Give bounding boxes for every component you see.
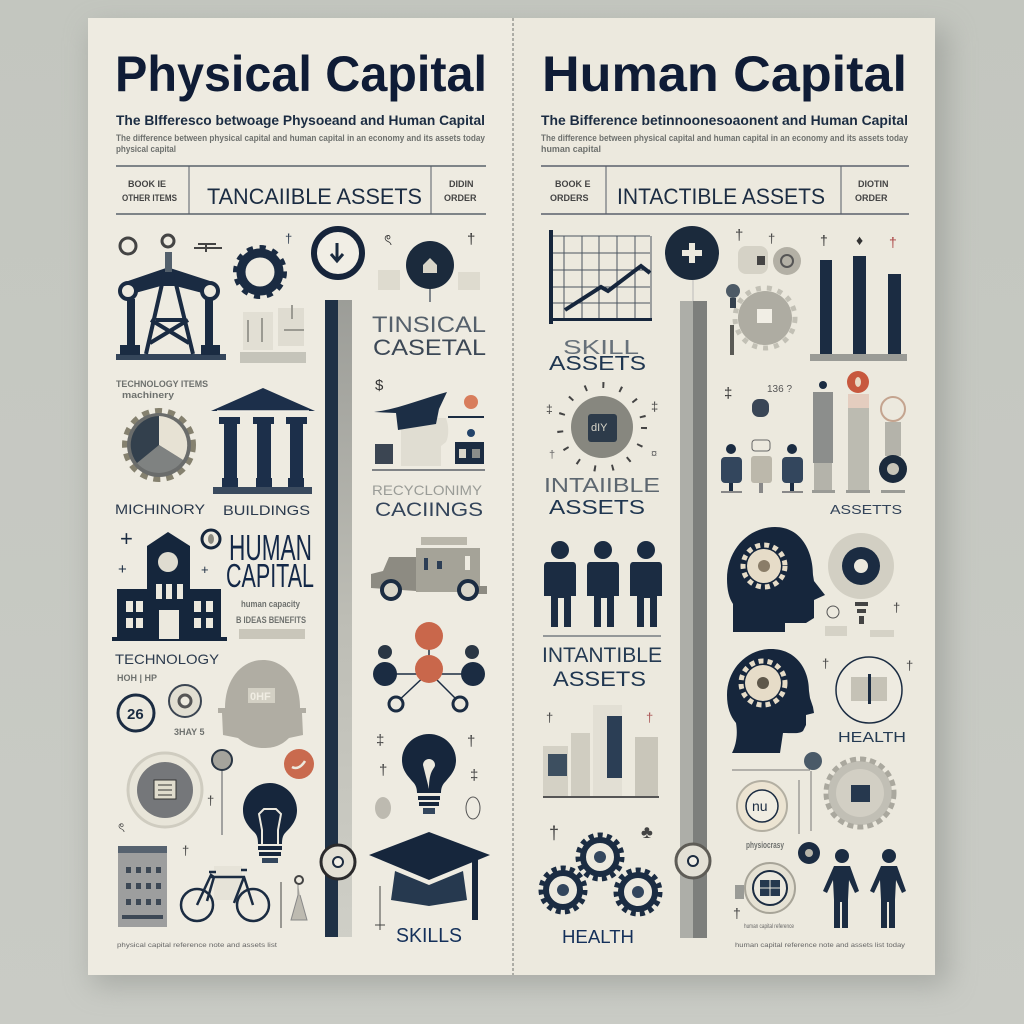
small symbols lower left: † xyxy=(182,843,189,858)
icon: medallion with rule: physiocrasy xyxy=(746,840,784,850)
icon: head with gear top xyxy=(727,527,825,632)
icon: lower medallion xyxy=(733,842,820,930)
label: skill assets: SKILL xyxy=(563,337,639,359)
icon: health target xyxy=(822,656,913,723)
icon: radiant circle: ¤ xyxy=(651,448,657,460)
right column: human capital xyxy=(541,46,913,949)
poster panel xyxy=(88,18,935,975)
label: skill assets xyxy=(549,337,646,375)
footnote left: physical capital reference note and assets list xyxy=(117,943,277,949)
icon: graduation cap xyxy=(369,832,490,920)
title: human capital: Human Capital xyxy=(542,46,907,102)
icon: dark circle top right: † xyxy=(467,231,475,248)
icon: radiant circle: dIY xyxy=(591,422,608,434)
label: human capital xyxy=(226,527,314,594)
icon: grey sketches: † xyxy=(768,231,775,246)
icon: circle badges: 3HAY 5 xyxy=(174,727,205,737)
label: tinsical casetal xyxy=(372,312,486,360)
icon: radiant circle: † xyxy=(549,449,555,461)
mini bar chart xyxy=(543,705,659,798)
icon: circle badges: 26 xyxy=(127,706,144,723)
label: human capital: HUMAN xyxy=(229,527,312,568)
small plus signs: + xyxy=(118,561,127,578)
label: health left: HEALTH xyxy=(562,927,634,947)
icon: head with gear lower xyxy=(727,649,814,753)
label: intangible assets xyxy=(544,475,660,519)
banner: tangible assets: ORDER xyxy=(444,193,477,203)
label: intantible assets: INTANTIBLE xyxy=(542,644,662,667)
icon: lower timeline marker xyxy=(321,845,355,879)
small captions xyxy=(236,599,306,639)
small text left: TECHNOLOGY ITEMS xyxy=(116,379,208,389)
icon: grey sketches xyxy=(726,227,801,355)
title: physical capital: Physical Capital xyxy=(115,46,487,102)
label: tinsical casetal: TINSICAL xyxy=(372,312,486,337)
small text left xyxy=(116,379,208,400)
label: caciings: RECYCLONIMY xyxy=(372,482,483,498)
label: health right: HEALTH xyxy=(838,729,906,746)
icon: school building xyxy=(112,532,227,641)
small captions: B IDEAS BENEFITS xyxy=(236,615,306,625)
icon: top marker right xyxy=(665,226,719,280)
label: intantible assets xyxy=(542,636,662,691)
small symbols beside bulb xyxy=(375,732,480,819)
icon: two people xyxy=(823,849,906,928)
icon: radiant circle: ‡ xyxy=(651,399,658,414)
body text left: The difference between physical capital and human capital in an economy and its assets today xyxy=(116,133,485,143)
icon: small dollar: $ xyxy=(375,377,384,394)
label: intangible assets: INTAIIBLE xyxy=(544,475,660,497)
icon: circle badges xyxy=(118,685,205,737)
banner: intangible assets: BOOK E xyxy=(555,179,591,189)
icon: pin and orange badge xyxy=(212,749,314,835)
label: intangible assets: ASSETS xyxy=(549,497,645,519)
icon: document blocks xyxy=(240,305,306,363)
label: skill assets: ASSETS xyxy=(549,353,646,375)
icon: gear top xyxy=(236,248,284,296)
icon: bicycle xyxy=(181,866,269,921)
icon: medallion with rule: nu xyxy=(752,798,768,814)
label: tinsical casetal: CASETAL xyxy=(373,335,486,360)
small symbols lower left xyxy=(118,793,307,928)
banner: tangible assets: OTHER ITEMS xyxy=(122,193,177,203)
bar chart top right: ♦ xyxy=(856,232,863,248)
timeline bar right xyxy=(680,280,707,938)
small plus signs: + xyxy=(201,562,209,577)
icon: three small figures: 136 ? xyxy=(767,384,792,395)
icon: lower marker right xyxy=(676,844,710,878)
subtitle left: The Blfferesco betwoage Physoeand and Human Capital xyxy=(116,112,485,128)
icon: grey sketches: † xyxy=(735,227,743,244)
bar chart top right: † xyxy=(889,234,897,250)
icon: oil derrick xyxy=(116,252,226,360)
bar chart top right: † xyxy=(820,232,828,248)
icon: machinery gear pie xyxy=(125,411,193,479)
icon: dark circle top right xyxy=(378,231,480,302)
icon: gear target xyxy=(825,533,900,637)
body text right: The difference between physical capital and human capital in an economy and its assets today xyxy=(541,133,908,143)
label: skills: SKILLS xyxy=(396,925,462,947)
label: caciings: CACIINGS xyxy=(375,500,483,521)
icon: dark circle top right: ৎ xyxy=(384,232,392,249)
mini bar chart: † xyxy=(646,710,653,725)
label: machinery: MICHINORY xyxy=(115,501,206,517)
banner: tangible assets xyxy=(116,166,486,214)
label: intantible assets: ASSETS xyxy=(553,668,646,691)
small symbols row xyxy=(120,231,292,254)
icon: truck xyxy=(371,537,487,599)
icon: grey helmet machine: 0HF xyxy=(250,691,271,703)
label: technology: TECHNOLOGY xyxy=(115,651,220,667)
label: human capital: CAPITAL xyxy=(226,557,314,594)
icon: health target: † xyxy=(906,658,913,673)
small text left: machinery xyxy=(122,390,174,400)
banner: intangible assets: DIOTIN xyxy=(858,179,888,189)
icon: lower medallion: † xyxy=(733,905,741,921)
icon: radiant circle xyxy=(546,385,658,469)
banner: intangible assets: ORDERS xyxy=(550,193,589,203)
banner: tangible assets: BOOK IE xyxy=(128,179,166,189)
icon: network nodes xyxy=(373,622,485,711)
icon: three small figures: ‡ xyxy=(724,385,732,402)
icon: health target: † xyxy=(822,656,829,671)
icon: coin xyxy=(202,530,220,548)
icon: gears trio: † xyxy=(549,823,559,843)
body text left: physical capital xyxy=(116,144,176,154)
small captions: human capacity xyxy=(241,599,300,609)
icon: gear medallion xyxy=(826,759,894,827)
small symbols row: † xyxy=(285,231,292,246)
banner: tangible assets: DIDIN xyxy=(449,179,474,189)
small symbols lower left: † xyxy=(207,793,214,808)
footnote right: human capital reference note and assets list today xyxy=(735,943,905,949)
small symbols beside bulb: ‡ xyxy=(376,732,384,749)
icon: top timeline marker xyxy=(314,229,362,277)
icon: grey disc xyxy=(128,753,202,827)
small symbols beside bulb: ‡ xyxy=(470,767,478,784)
icon: gear target: † xyxy=(893,600,900,615)
icon: three people xyxy=(544,541,662,627)
small plus signs xyxy=(118,526,209,578)
bar chart top right xyxy=(810,232,907,361)
label: buildings: BUILDINGS xyxy=(223,502,310,518)
small plus signs: + xyxy=(120,526,133,551)
icon: light bulb right xyxy=(402,734,456,814)
body text right xyxy=(541,133,908,154)
line chart xyxy=(549,230,652,324)
icon: classical building xyxy=(211,388,315,494)
mini bar chart: † xyxy=(546,710,553,725)
left column: physical capital xyxy=(112,46,490,949)
icon: tall column pillars xyxy=(812,371,907,493)
icon: gears trio xyxy=(541,822,660,914)
icon: three small figures xyxy=(721,384,803,493)
timeline bar left xyxy=(325,300,352,937)
icon: lower medallion: human capital reference xyxy=(744,924,795,930)
banner: tangible assets: TANCAIIBLE ASSETS xyxy=(207,184,422,209)
label: assets right: ASSETTS xyxy=(830,502,902,517)
small symbols lower left: ৎ xyxy=(118,820,125,835)
icon: gears trio: ♣ xyxy=(641,822,653,842)
icon: grey helmet machine xyxy=(218,660,306,748)
icon: light bulb left xyxy=(243,783,297,863)
subtitle right: The Bifference betinnoonesoaonent and Human Capital xyxy=(541,112,908,128)
banner: intangible assets: INTACTIBLE ASSETS xyxy=(617,184,825,209)
banner: intangible assets: ORDER xyxy=(855,193,888,203)
body text right: human capital xyxy=(541,144,601,154)
icon: office block xyxy=(118,846,167,927)
label: caciings xyxy=(372,482,483,521)
body text left xyxy=(116,133,485,154)
icon: radiant circle: ‡ xyxy=(546,402,553,416)
banner: intangible assets xyxy=(541,166,909,214)
small cross below cap xyxy=(375,886,385,930)
small symbols beside bulb: † xyxy=(467,733,475,750)
icon: graduate head xyxy=(372,392,485,470)
icon: medallion with rule xyxy=(732,752,822,850)
small caption technology: HOH | HP xyxy=(117,673,157,683)
small symbols beside bulb: † xyxy=(379,762,387,779)
